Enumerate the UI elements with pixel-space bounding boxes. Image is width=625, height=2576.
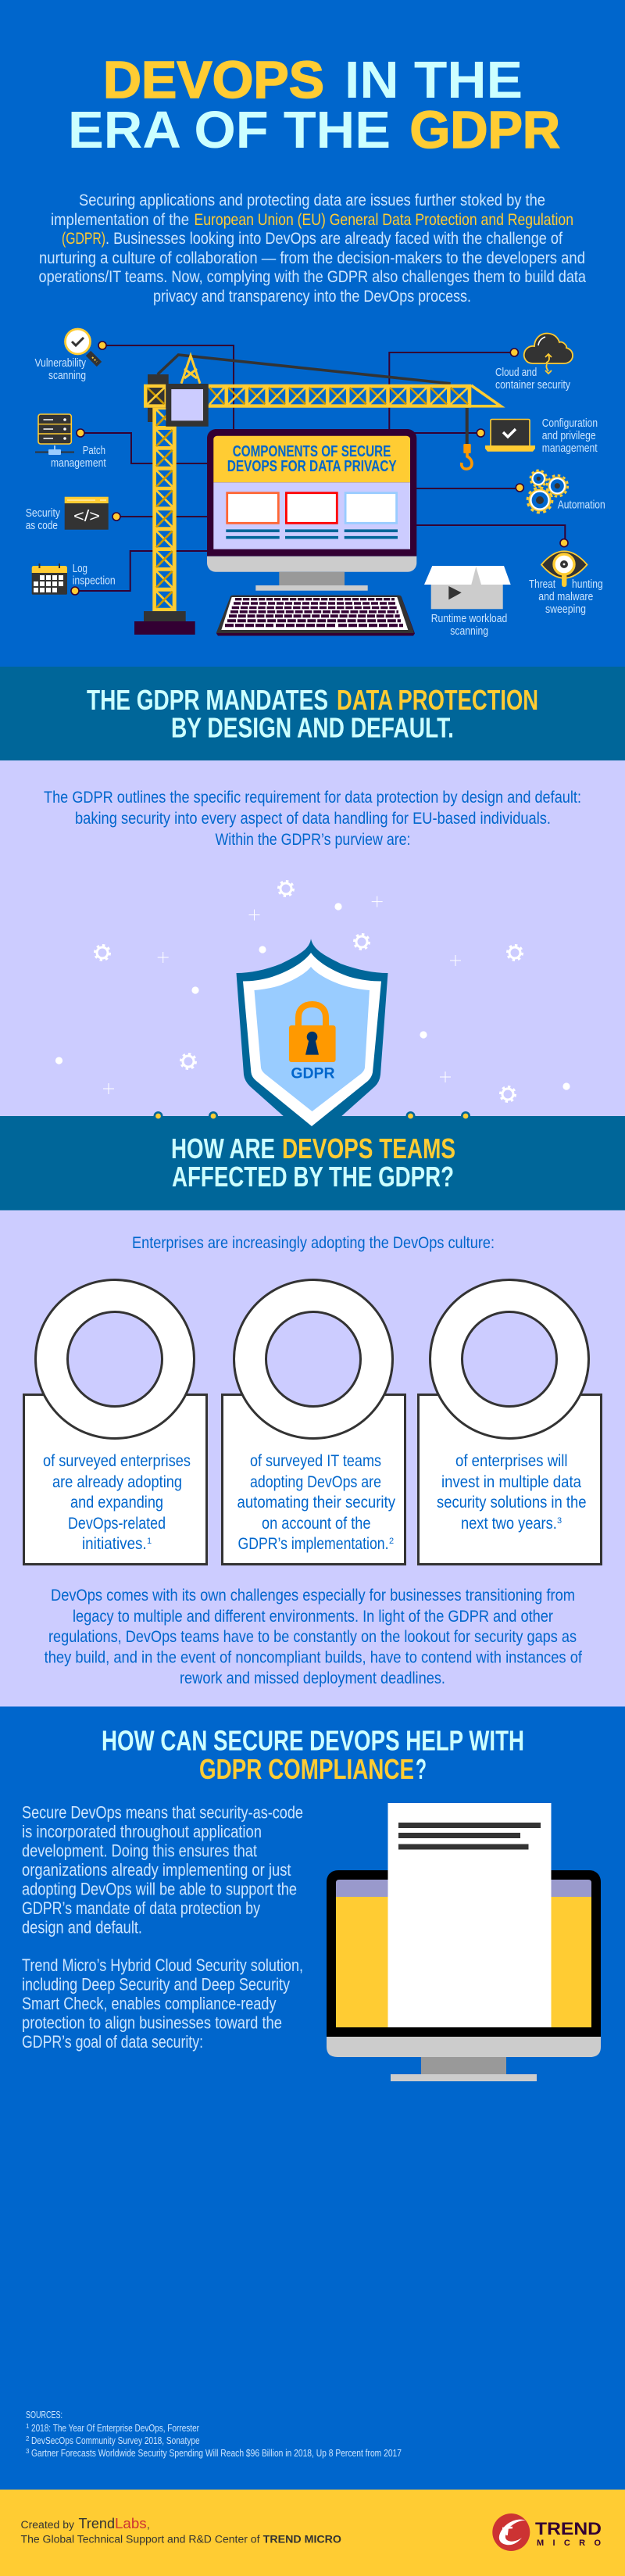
card text: security solutions in the bbox=[437, 1494, 586, 1512]
connector dot bbox=[77, 429, 84, 437]
intro text block: implementation of the bbox=[51, 211, 189, 229]
label bbox=[495, 366, 570, 392]
label: and privilege bbox=[542, 429, 596, 442]
text block: secure DevOps definition: adopting DevOps will be able to support the bbox=[22, 1879, 297, 1899]
intro text block: privacy and transparency into the DevOps process. bbox=[153, 288, 471, 306]
laptop bbox=[485, 419, 535, 452]
stat card 1 bbox=[23, 1280, 206, 1565]
card text: invest in multiple data bbox=[441, 1473, 581, 1491]
monitor: components of secure DevOps bbox=[207, 429, 416, 591]
cloud bbox=[524, 333, 573, 374]
network connector bbox=[35, 445, 74, 455]
box bbox=[424, 566, 511, 609]
footer credit: Labs bbox=[115, 2516, 147, 2531]
footer credit: The Global Technical Support and R&D Center of bbox=[20, 2534, 260, 2545]
crane head block bbox=[144, 385, 166, 408]
padlock bbox=[289, 1004, 336, 1062]
connector dot bbox=[71, 587, 79, 595]
calendar bbox=[32, 564, 67, 595]
card text: are already adopting bbox=[52, 1473, 182, 1491]
label: Cloud and bbox=[495, 366, 537, 379]
connector dot bbox=[98, 342, 106, 349]
heading band: GDPR mandates: BY DESIGN AND DEFAULT. bbox=[171, 711, 454, 744]
shield white layer bbox=[243, 953, 381, 1126]
decorative sparkles: gears, dots, plus signs bbox=[55, 882, 570, 1102]
logo mark bbox=[492, 2513, 530, 2551]
sources: DevSecOps Community Survey 2018, Sonatype bbox=[31, 2435, 200, 2446]
crane cables bbox=[158, 355, 451, 384]
card box bbox=[222, 1394, 405, 1565]
monitor text lines bbox=[226, 531, 398, 538]
logo wordmark bbox=[535, 2519, 602, 2548]
label: as code bbox=[26, 519, 58, 532]
text block: secure DevOps definition: design and default. bbox=[22, 1918, 142, 1937]
monitor chin bbox=[207, 556, 416, 572]
crane hook bbox=[462, 408, 472, 469]
sources: 2 bbox=[26, 2435, 30, 2442]
connector dot bbox=[112, 513, 120, 521]
card text: adopting DevOps are bbox=[250, 1473, 381, 1491]
crane tower bbox=[152, 408, 177, 611]
label: management bbox=[542, 442, 598, 455]
label: scanning bbox=[450, 624, 488, 638]
panel: GDPR mandates background bbox=[0, 760, 625, 1117]
card text: and expanding bbox=[70, 1494, 163, 1512]
crane base bbox=[134, 611, 195, 635]
label bbox=[431, 612, 507, 638]
card text: on account of the bbox=[262, 1515, 370, 1533]
heading band: DevOps teams affected: DEVOPS TEAMS bbox=[282, 1132, 455, 1165]
connector dot bbox=[477, 429, 484, 437]
heading band: DevOps teams affected: AFFECTED BY THE GDPR? bbox=[172, 1161, 454, 1193]
logo wordmark: TREND bbox=[535, 2519, 602, 2538]
magnifier bbox=[66, 329, 99, 364]
text block: GDPR requirement: baking security into every aspect of data handling for EU-based individuals. bbox=[75, 810, 551, 828]
card text: of enterprises will bbox=[455, 1452, 567, 1470]
label bbox=[529, 578, 603, 616]
stat card 3 bbox=[419, 1280, 602, 1565]
server stack bbox=[38, 414, 71, 444]
icon: monitor with document bbox=[327, 1803, 601, 2081]
card text: 3 bbox=[557, 1516, 562, 1526]
monitor neck bbox=[279, 572, 345, 585]
gears bbox=[527, 470, 568, 513]
connector dot bbox=[516, 484, 523, 492]
card text bbox=[43, 1452, 191, 1553]
title: DEVOPS bbox=[103, 51, 324, 109]
label bbox=[34, 356, 86, 382]
card text: next two years. bbox=[461, 1515, 557, 1533]
text block: DevOps challenges: legacy to multiple and different environments. In light of the GDPR and other bbox=[73, 1608, 553, 1626]
heading band: GDPR mandates bbox=[0, 667, 625, 760]
text block: Trend Micro solution: Trend Micro’s Hybrid Cloud Security solution, bbox=[22, 1955, 303, 1975]
sources: 1 bbox=[26, 2423, 30, 2430]
icon: runtime workload scanning bbox=[424, 566, 511, 638]
donut bbox=[36, 1280, 194, 1438]
connector dot bbox=[510, 349, 518, 356]
card text: 1 bbox=[147, 1537, 152, 1546]
shield blue layer bbox=[255, 967, 370, 1111]
label: management bbox=[51, 456, 106, 470]
label: scanning bbox=[48, 369, 86, 382]
text block: DevOps challenges bbox=[45, 1587, 582, 1687]
icon: threat hunting and malware sweeping bbox=[529, 539, 603, 616]
label: Threat bbox=[529, 578, 556, 591]
eye with magnifier bbox=[541, 551, 588, 587]
panel: top blue background bbox=[0, 0, 625, 667]
text block: GDPR requirement bbox=[44, 789, 581, 849]
monitor neck bbox=[421, 2057, 506, 2074]
crane mast bbox=[181, 356, 200, 384]
monitor base bbox=[391, 2074, 537, 2081]
title: GDPR bbox=[409, 101, 560, 159]
intro text block bbox=[39, 191, 586, 306]
text block: Trend Micro solution bbox=[22, 1955, 303, 2052]
heading: secure DevOps help: ? bbox=[416, 1753, 427, 1785]
text block: secure DevOps definition: development. Doing this ensures that bbox=[22, 1841, 257, 1860]
footer band bbox=[0, 2490, 625, 2576]
logo wordmark: MICRO bbox=[537, 2538, 601, 2548]
heading band: DevOps teams affected bbox=[0, 1116, 625, 1210]
text block: Trend Micro solution: Smart Check, enables compliance-ready bbox=[22, 1994, 277, 2013]
intro text block: . Businesses looking into DevOps are already faced with the challenge of bbox=[105, 230, 562, 248]
card box bbox=[23, 1394, 206, 1565]
card text bbox=[238, 1452, 395, 1553]
icon: GDPR shield bbox=[236, 939, 388, 1126]
icon: patch management bbox=[35, 414, 106, 470]
label: sweeping bbox=[545, 603, 586, 616]
crane bbox=[134, 355, 501, 635]
label: inspection bbox=[73, 574, 116, 588]
heading: secure DevOps help: GDPR COMPLIANCE bbox=[199, 1753, 414, 1785]
keyboard bbox=[216, 596, 415, 636]
footer credit bbox=[20, 2516, 341, 2545]
sources: Gartner Forecasts Worldwide Security Spending Will Reach $96 Billion in 2018, Up 8 Percent from 2017 bbox=[31, 2447, 402, 2459]
label: container security bbox=[495, 378, 570, 392]
connector lines bbox=[75, 345, 565, 591]
shield outer bbox=[236, 939, 388, 1118]
text block: secure DevOps definition bbox=[22, 1802, 303, 1937]
code window: </> bbox=[73, 508, 100, 525]
icon: security as code bbox=[26, 497, 120, 532]
text block: secure DevOps definition: is incorporated throughout application bbox=[22, 1822, 262, 1841]
footer credit: , bbox=[147, 2519, 150, 2531]
icon: configuration and privilege management bbox=[477, 417, 598, 455]
icon: vulnerability scanning bbox=[34, 329, 106, 382]
sources: 2018: The Year Of Enterprise DevOps, Forrester bbox=[31, 2422, 200, 2434]
card text: DevOps-related bbox=[68, 1515, 166, 1533]
label: Runtime workload bbox=[431, 612, 507, 625]
icon: cloud and container security bbox=[495, 333, 573, 392]
icon: log inspection bbox=[32, 562, 116, 595]
intro text block: Securing applications and protecting data are issues further stoked by the bbox=[79, 191, 545, 209]
card text: of surveyed IT teams bbox=[250, 1452, 381, 1470]
screen top bar bbox=[336, 1880, 591, 1897]
donut bbox=[430, 1280, 589, 1438]
document bbox=[388, 1803, 552, 2027]
card text: 2 bbox=[389, 1537, 394, 1546]
card text bbox=[437, 1452, 586, 1533]
text block: GDPR requirement: Within the GDPR’s purview are: bbox=[216, 831, 411, 849]
monitor frame bbox=[207, 429, 416, 556]
footer credit: TREND MICRO bbox=[263, 2534, 341, 2545]
text block: Trend Micro solution: protection to align businesses toward the bbox=[22, 2013, 282, 2032]
label bbox=[26, 506, 60, 532]
monitor yellow screen header bbox=[213, 436, 410, 482]
label: hunting bbox=[572, 578, 603, 591]
panel: DevOps teams background bbox=[0, 1210, 625, 1707]
sources: 3 bbox=[26, 2448, 30, 2455]
icon: automation bbox=[516, 470, 605, 513]
crane counterweight bbox=[148, 374, 169, 422]
card text: GDPR’s implementation. bbox=[238, 1535, 389, 1553]
heading band: GDPR mandates: THE GDPR MANDATES bbox=[87, 684, 328, 716]
text block: Trend Micro solution: GDPR’s goal of data security: bbox=[22, 2032, 203, 2052]
text block: secure DevOps definition: Secure DevOps means that security-as-code bbox=[22, 1802, 303, 1823]
title: IN THE bbox=[345, 51, 523, 109]
label: Automation bbox=[558, 499, 605, 512]
screen yellow area bbox=[336, 1897, 591, 2027]
logo: Trend Micro bbox=[492, 2513, 602, 2551]
monitor heading: DEVOPS FOR DATA PRIVACY bbox=[227, 457, 397, 475]
text block: secure DevOps definition: GDPR’s mandate of data protection by bbox=[22, 1898, 260, 1918]
monitor heading: COMPONENTS OF SECURE bbox=[233, 442, 391, 460]
heading band: GDPR mandates: DATA PROTECTION bbox=[337, 684, 538, 716]
intro text block: (GDPR) bbox=[62, 230, 105, 248]
connector dot bbox=[560, 539, 568, 547]
text block: DevOps challenges: rework and missed deployment deadlines. bbox=[180, 1669, 445, 1687]
monitor frame bbox=[327, 1870, 601, 2037]
crane cab bbox=[166, 384, 209, 427]
heading: secure DevOps help bbox=[102, 1724, 524, 1785]
stat card 2 bbox=[222, 1280, 405, 1565]
donut bbox=[234, 1280, 392, 1438]
crane jib bbox=[209, 385, 501, 408]
label bbox=[542, 417, 598, 455]
sources: SOURCES: bbox=[26, 2409, 62, 2420]
monitor windows bbox=[227, 493, 397, 523]
monitor lavender screen body bbox=[213, 482, 410, 549]
label: Patch bbox=[83, 444, 105, 457]
shield label: GDPR bbox=[291, 1066, 335, 1082]
text block: Trend Micro solution: including Deep Security and Deep Security bbox=[22, 1974, 290, 1995]
label bbox=[73, 562, 116, 588]
card text: of surveyed enterprises bbox=[43, 1452, 191, 1470]
monitor chin bbox=[327, 2037, 601, 2057]
footer credit: Trend bbox=[78, 2516, 115, 2531]
sources bbox=[26, 2409, 402, 2459]
monitor heading bbox=[227, 442, 397, 475]
label: Configuration bbox=[542, 417, 598, 430]
monitor base bbox=[255, 585, 368, 591]
title bbox=[68, 51, 560, 159]
text block: secure DevOps definition: organizations already implementing or just bbox=[22, 1860, 291, 1880]
title: ERA OF THE bbox=[68, 101, 391, 159]
panel: secure DevOps background bbox=[0, 1707, 625, 2490]
label: Vulnerability bbox=[34, 356, 86, 370]
label: Log bbox=[73, 562, 88, 575]
label bbox=[51, 444, 106, 470]
label: and malware bbox=[538, 590, 593, 603]
footer credit: Created by bbox=[20, 2519, 74, 2531]
label: Security bbox=[26, 506, 60, 520]
card text: automating their security bbox=[238, 1494, 395, 1512]
text: adoption intro: Enterprises are increasingly adopting the DevOps culture: bbox=[132, 1234, 495, 1252]
band connector dots bbox=[153, 1111, 470, 1121]
heading band: DevOps teams affected: HOW ARE bbox=[171, 1132, 275, 1165]
card box bbox=[419, 1394, 602, 1565]
card text: initiatives. bbox=[82, 1535, 147, 1553]
